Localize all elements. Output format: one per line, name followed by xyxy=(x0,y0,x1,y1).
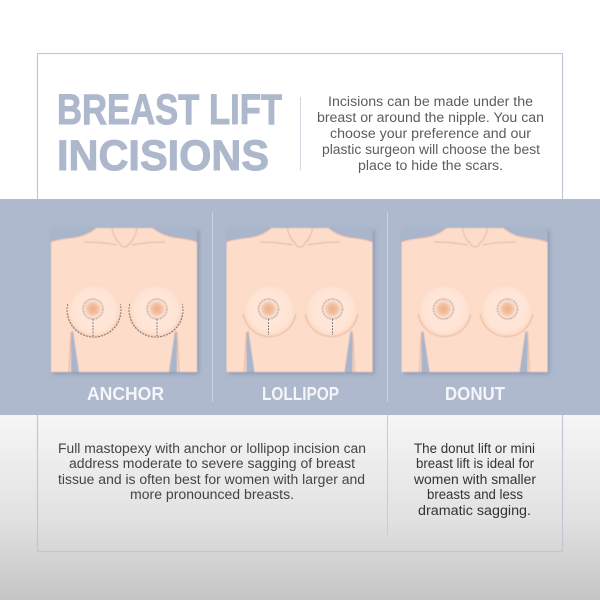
text: anchor and lollipop description: address moderate to severe sagging of breast xyxy=(69,456,355,471)
intro text: breast or around the nipple. You can xyxy=(317,110,544,125)
text: donut description: dramatic sagging. xyxy=(418,503,531,518)
text: anchor and lollipop description: more pronounced breasts. xyxy=(130,487,294,502)
text: donut description: breast lift is ideal for xyxy=(416,456,534,471)
intro text: plastic surgeon will choose the best xyxy=(322,142,540,157)
text: anchor and lollipop description xyxy=(58,441,366,502)
title: INCISIONS xyxy=(57,132,269,180)
label: anchor: ANCHOR xyxy=(87,384,164,404)
text: anchor and lollipop description: tissue and is often best for women with larger and xyxy=(58,472,365,487)
panel: incision types band xyxy=(0,199,600,415)
panel: donut incision xyxy=(402,228,548,372)
text: donut description xyxy=(413,441,537,518)
text: anchor and lollipop description: Full mastopexy with anchor or lollipop incision can xyxy=(58,441,366,456)
label: donut: DONUT xyxy=(445,384,505,404)
panel: anchor incision xyxy=(51,228,197,372)
intro text: choose your preference and our xyxy=(330,126,532,141)
intro text xyxy=(317,94,544,173)
title xyxy=(57,86,282,180)
panel: lollipop incision xyxy=(226,228,372,372)
intro text: Incisions can be made under the xyxy=(328,94,533,109)
intro text: place to hide the scars. xyxy=(358,158,503,173)
label: lollipop: LOLLIPOP xyxy=(262,384,339,404)
text: donut description: breasts and less xyxy=(427,487,523,502)
title: BREAST LIFT xyxy=(57,86,282,134)
text: donut description: women with smaller xyxy=(413,472,537,487)
outer frame xyxy=(38,54,562,552)
text: donut description: The donut lift or mini xyxy=(414,441,535,456)
